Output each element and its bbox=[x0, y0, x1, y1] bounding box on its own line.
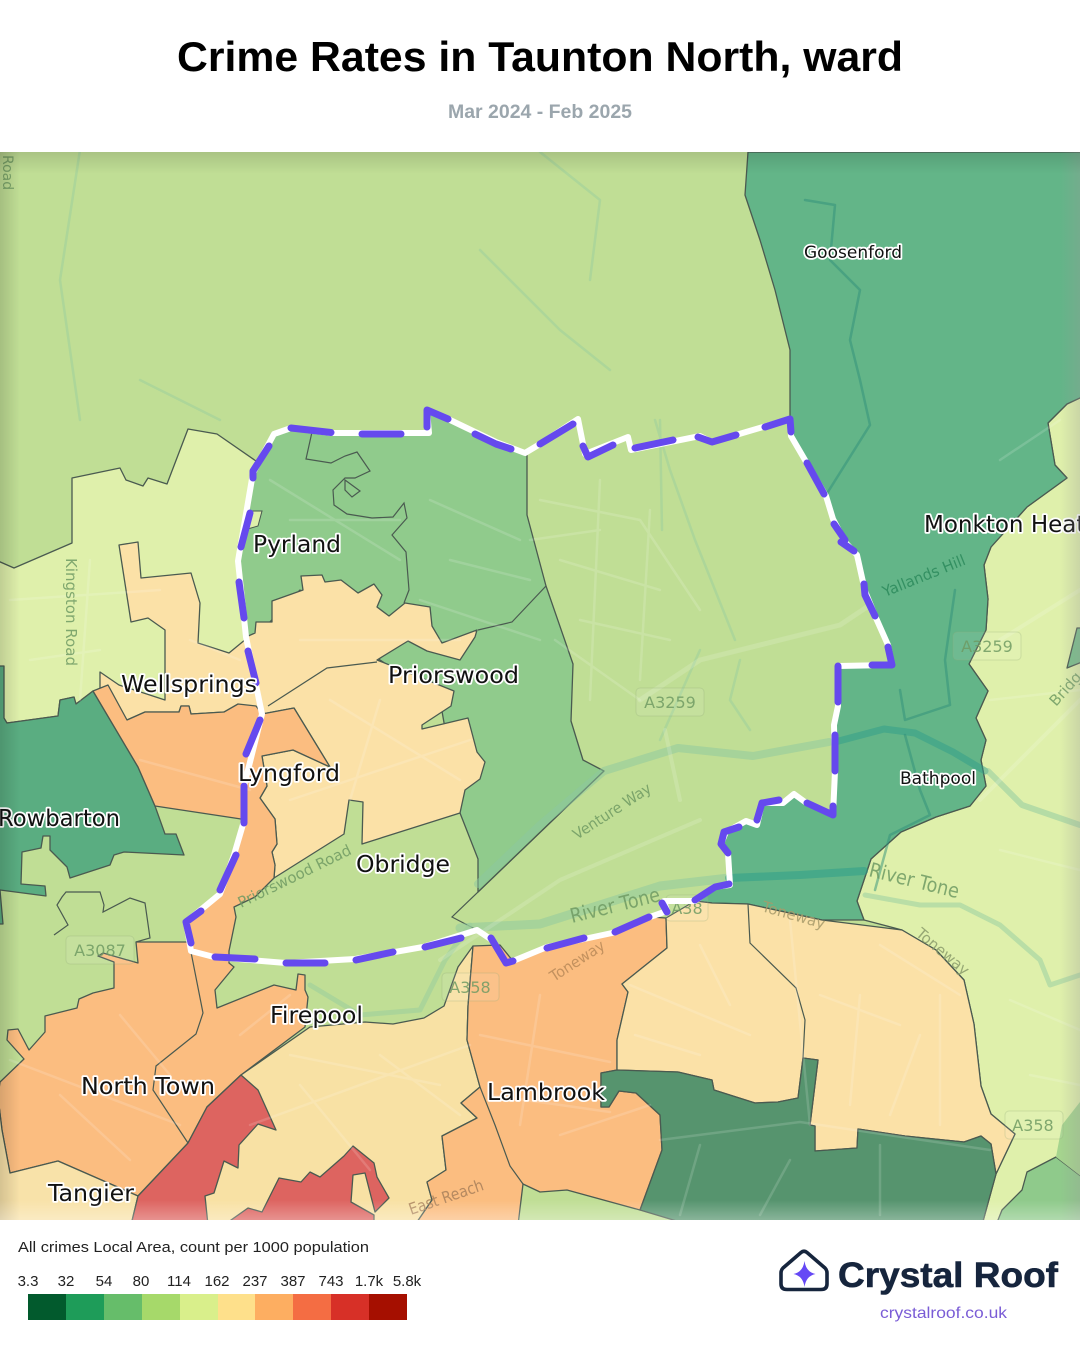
shield: A3259 centre bbox=[636, 688, 704, 716]
region: peach Firepool south bbox=[188, 945, 480, 1220]
road and river labels: Venture Way bbox=[569, 779, 655, 843]
region: peach Priorswood and Lyngford bbox=[246, 575, 485, 878]
region: medium green Pyrland and Priorswood bbox=[238, 410, 604, 892]
legend tick labels: 114 bbox=[167, 1273, 191, 1290]
shield: A38 bbox=[666, 895, 708, 921]
place labels bbox=[0, 243, 1080, 1207]
legend title: All crimes Local Area, count per 1000 population bbox=[18, 1239, 369, 1256]
place labels: Wellsprings bbox=[121, 672, 257, 698]
ward boundary bbox=[186, 410, 892, 963]
shield: A358 east: A358 bbox=[1012, 1116, 1054, 1135]
road shields bbox=[66, 632, 1063, 1139]
road and river labels bbox=[0, 155, 1080, 1219]
legend tick labels: 5.8k bbox=[393, 1273, 422, 1290]
shield: A3087 bbox=[66, 936, 134, 964]
place labels: Pyrland bbox=[253, 532, 341, 558]
legend tick labels: 1.7k bbox=[355, 1273, 384, 1290]
legend tick labels bbox=[18, 1273, 422, 1290]
shield: A3259 east bbox=[953, 632, 1021, 660]
legend tick labels: 743 bbox=[318, 1273, 344, 1290]
region: peach Wellsprings bbox=[100, 542, 262, 720]
region: Rowbarton dark green bbox=[0, 666, 184, 924]
region: green east sliver bbox=[1056, 1102, 1080, 1177]
region: pale north-west bbox=[0, 429, 262, 723]
road and river labels: Toneway bbox=[759, 897, 827, 933]
icon: house with star bbox=[781, 1251, 827, 1290]
place labels: North Town bbox=[81, 1074, 215, 1100]
region: dark green Monkton Heath bbox=[695, 152, 1080, 920]
shield: A3259 east: A3259 bbox=[961, 637, 1013, 656]
region: Wellsprings north notch bbox=[249, 510, 263, 529]
road and river labels: River Tone bbox=[867, 858, 962, 903]
region: red north bbox=[131, 1075, 276, 1225]
legend tick labels: 162 bbox=[204, 1273, 230, 1290]
legend tick labels: 54 bbox=[96, 1273, 112, 1290]
legend tick labels: 32 bbox=[58, 1273, 74, 1290]
Lambrook inner boundary bbox=[480, 1087, 523, 1184]
region: red south bbox=[224, 1146, 389, 1225]
logo wordmark: Crystal Roof bbox=[838, 1256, 1058, 1295]
region: green east wedge bbox=[1067, 628, 1080, 668]
legend tick labels: 80 bbox=[133, 1273, 149, 1290]
shield: A3259 centre: A3259 bbox=[644, 693, 696, 712]
place labels: Goosenford bbox=[804, 243, 902, 263]
place labels: Priorswood bbox=[388, 663, 519, 689]
peach estate inner boundary bbox=[748, 904, 805, 1058]
legend colour scale bbox=[28, 1294, 407, 1320]
shield: A358 centre: A358 bbox=[449, 978, 491, 997]
road and river labels: Priorswood Road bbox=[235, 841, 354, 912]
place labels: Tangier bbox=[47, 1181, 135, 1207]
title: Crime Rates in Taunton North, ward bbox=[177, 33, 903, 80]
place labels: Firepool bbox=[270, 1003, 363, 1029]
legend tick labels: 237 bbox=[242, 1273, 268, 1290]
region: Rowbarton south lobe outline bbox=[54, 892, 150, 942]
shield: A358 centre bbox=[442, 973, 499, 1001]
place labels: Rowbarton bbox=[0, 806, 120, 832]
road and river labels: Toneway bbox=[546, 936, 608, 986]
place labels: Bathpool bbox=[900, 769, 976, 789]
legend bbox=[18, 1239, 422, 1320]
region: orange North Town, Lyngford strip bbox=[0, 685, 330, 1196]
region: orange Lambrook bbox=[415, 917, 667, 1225]
region: Pyrland inner boundary bbox=[305, 434, 570, 928]
map edge vignette bbox=[0, 152, 1080, 1220]
road and river labels: East Reach bbox=[406, 1175, 486, 1219]
place labels: Lyngford bbox=[238, 761, 340, 787]
road and river labels: Yallands Hill bbox=[879, 551, 968, 601]
peach inner boundary bbox=[268, 662, 377, 706]
legend tick labels: 3.3 bbox=[18, 1273, 38, 1290]
subtitle: date range: Mar 2024 - Feb 2025 bbox=[448, 102, 632, 123]
shield: A3087: A3087 bbox=[74, 941, 126, 960]
shield: A358 east bbox=[1005, 1111, 1063, 1139]
choropleth map bbox=[0, 150, 1080, 1225]
region: darkest green south bbox=[601, 1058, 996, 1225]
region: peach Tangier bbox=[0, 1108, 138, 1220]
roads bbox=[10, 420, 1080, 1215]
road and river labels: Toneway bbox=[912, 924, 973, 979]
legend tick labels: 387 bbox=[280, 1273, 306, 1290]
shield: A38: A38 bbox=[671, 899, 703, 918]
orange inner boundary bbox=[153, 942, 203, 1143]
website url: crystalroof.co.uk bbox=[880, 1305, 1008, 1322]
region: peach south-east estate bbox=[617, 901, 1015, 1174]
place labels: Lambrook bbox=[487, 1080, 606, 1106]
place labels: Obridge bbox=[356, 852, 450, 878]
region: medium green south-east corner bbox=[996, 1157, 1080, 1225]
logo bbox=[781, 1251, 1058, 1322]
road and river labels: River Tone bbox=[567, 882, 662, 928]
road and river labels: Kingston Road bbox=[62, 558, 80, 666]
rivers and streams bbox=[60, 150, 1080, 1015]
region: pale east bbox=[857, 397, 1080, 1225]
